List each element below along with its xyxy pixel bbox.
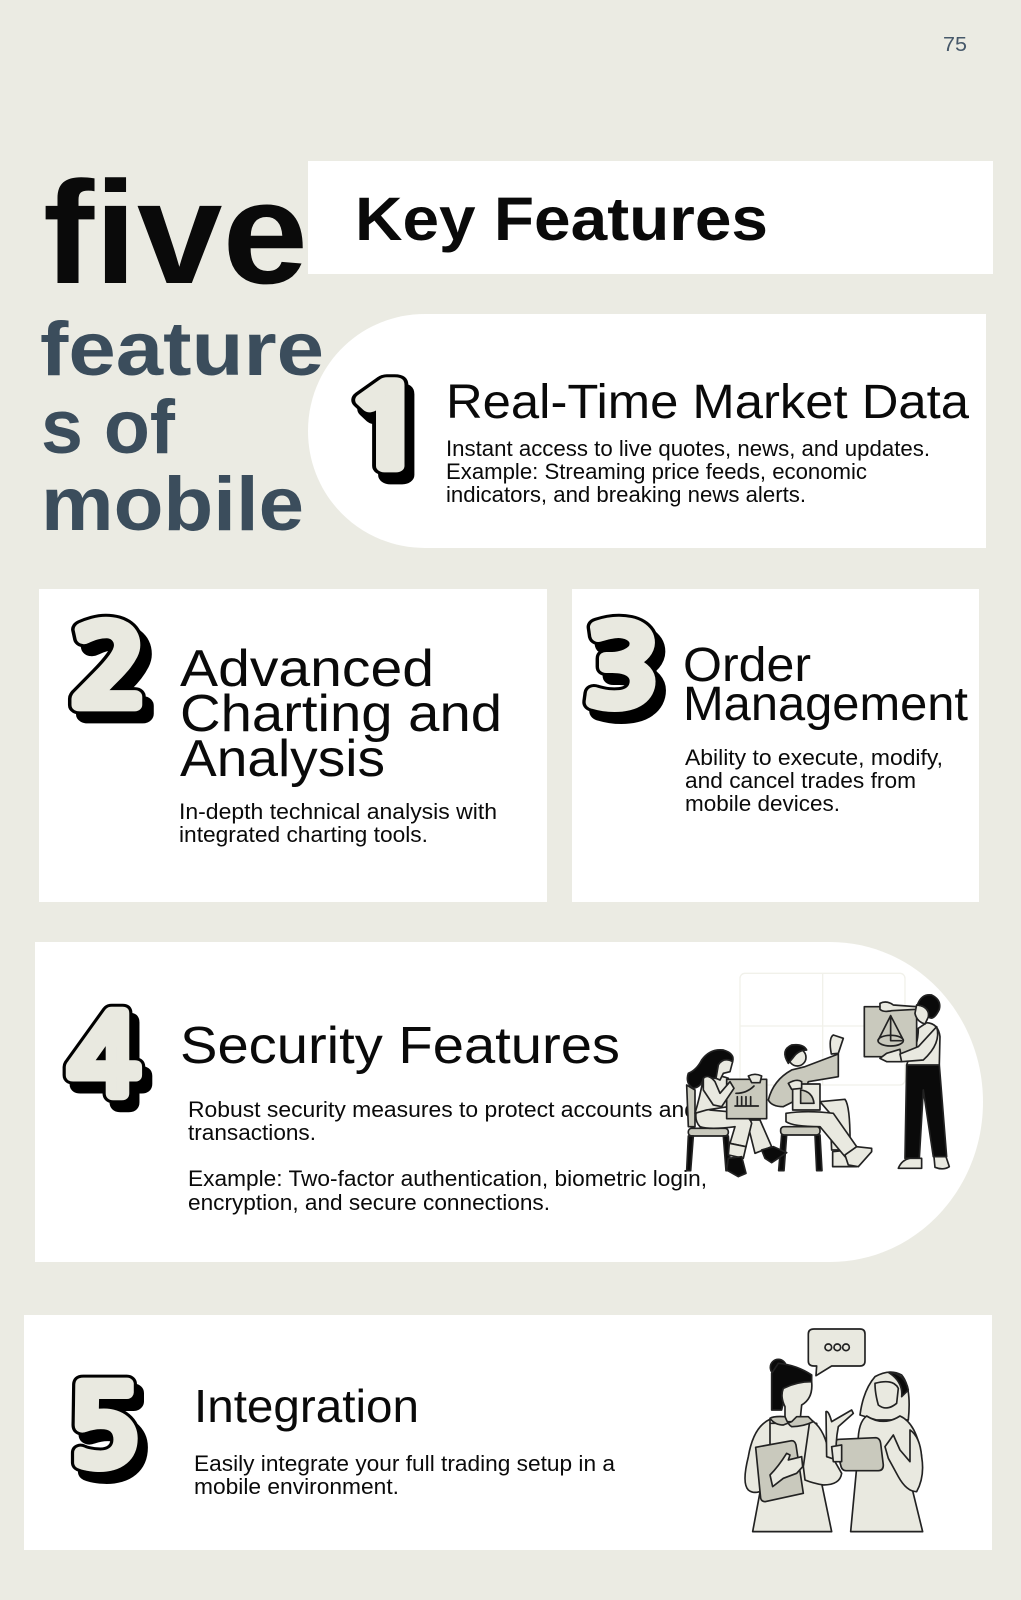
feature 4 description: Example: Two-factor authentication, biometric login, <box>188 1166 707 1191</box>
feature 4 title: Security Features <box>180 1017 620 1075</box>
feature 3 description <box>685 745 943 816</box>
feature 5 title: Integration <box>194 1380 419 1432</box>
icon: number 3: 3 <box>591 623 667 732</box>
feature 1 description: Instant access to live quotes, news, and updates. <box>446 436 930 461</box>
feature 4 description <box>188 1097 707 1215</box>
feature 1 description: Example: Streaming price feeds, economic <box>446 459 867 484</box>
icon: number 4: 4 <box>68 1003 140 1112</box>
icon: number 5: 5 <box>75 1383 147 1492</box>
panel: feature 4 security features <box>35 942 983 1262</box>
feature 2 description: integrated charting tools. <box>179 822 428 847</box>
panel: feature 2 advanced charting <box>39 589 547 902</box>
icon: number 4: 4 <box>75 1012 147 1121</box>
feature 2 title: Advanced <box>180 640 434 698</box>
icon: number 2: 2 <box>70 614 148 723</box>
title panel: Key Features: Key Features <box>355 185 768 253</box>
feature 2 title: Charting and <box>180 685 502 743</box>
feature 4 description: Robust security measures to protect accounts and <box>188 1097 697 1122</box>
illustration: team presenting charts <box>687 973 949 1177</box>
title panel: Key Features <box>308 161 993 274</box>
icon: number 1: 1 <box>349 382 437 493</box>
left person <box>687 1050 787 1177</box>
panel: feature 1 real-time market data <box>308 314 986 548</box>
icon: number 2: 2 <box>70 614 148 723</box>
feature 3 description: and cancel trades from <box>685 768 916 793</box>
speech bubble <box>808 1329 865 1376</box>
feature 5 description: Easily integrate your full trading setup in a <box>194 1451 616 1476</box>
page number: 75 <box>943 34 967 56</box>
feature 3 title: Management <box>683 678 968 731</box>
feature 5 description <box>194 1451 616 1499</box>
feature 2 description: In-depth technical analysis with <box>179 799 497 824</box>
heading: features of mobile: s of <box>41 385 176 470</box>
feature 2 title <box>180 640 502 788</box>
icon: number 3: 3 <box>584 614 660 723</box>
feature 2 title: Analysis <box>180 730 385 788</box>
feature 1 title: Real-Time Market Data <box>446 376 969 429</box>
heading: five: five <box>43 151 308 314</box>
feature 1 description <box>446 436 930 507</box>
feature 3 title <box>683 639 968 731</box>
feature 3 description: Ability to execute, modify, <box>685 745 943 770</box>
panel: feature 5 integration <box>24 1315 992 1550</box>
feature 4 description: encryption, and secure connections. <box>188 1190 550 1215</box>
feature 5 description: mobile environment. <box>194 1474 399 1499</box>
icon: number 1: 1 <box>343 373 431 484</box>
heading: features of mobile <box>40 307 324 547</box>
icon: number 5: 5 <box>68 1374 140 1483</box>
feature 1 description: indicators, and breaking news alerts. <box>446 482 806 507</box>
icon: number 4: 4 <box>68 1003 140 1112</box>
icon: number 3: 3 <box>584 614 660 723</box>
icon: number 1 <box>343 373 437 493</box>
icon: number 5: 5 <box>68 1374 140 1483</box>
illustration: two women talking <box>745 1329 923 1532</box>
left woman <box>745 1359 853 1532</box>
feature 4 description: transactions. <box>188 1120 316 1145</box>
right woman <box>835 1372 923 1532</box>
feature 3 title: Order <box>683 639 811 692</box>
panel: feature 3 order management <box>572 589 979 902</box>
icon: number 2: 2 <box>78 623 156 732</box>
feature 3 description: mobile devices. <box>685 791 840 816</box>
right presenter <box>864 995 949 1169</box>
feature 2 description <box>179 799 497 847</box>
heading: features of mobile: mobile <box>41 462 304 547</box>
middle person <box>768 1035 872 1171</box>
icon: number 1: 1 <box>343 373 431 484</box>
heading: features of mobile: feature <box>40 307 324 392</box>
